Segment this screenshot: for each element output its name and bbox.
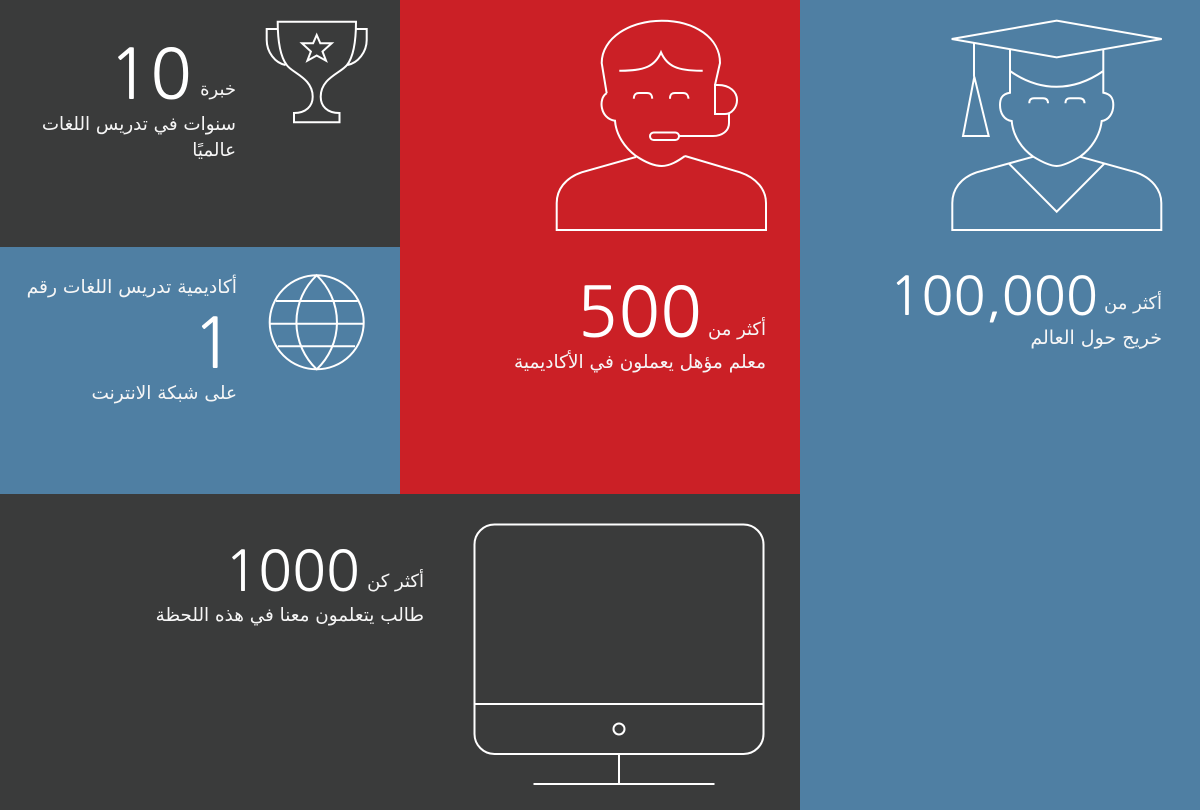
stat: 1000 students xyxy=(156,544,424,626)
number: 1000: 1000 xyxy=(224,544,360,600)
number: 1: 1 xyxy=(192,309,234,378)
text: qualified teachers: معلم مؤهل يعملون في الأكاديمية xyxy=(514,352,766,373)
panel: blue ranking xyxy=(0,247,400,494)
label: experience word: خبرة xyxy=(200,79,236,100)
panel: dark students xyxy=(0,494,800,810)
stat: rank 1 online xyxy=(27,274,237,404)
icon: monitor xyxy=(474,524,764,784)
text: years of teaching: عالميًا xyxy=(192,140,236,161)
text: on the internet: على شبكة الانترنت xyxy=(91,383,237,404)
label: more than: أكثر من xyxy=(708,319,766,340)
number: 10: 10 xyxy=(108,40,192,109)
text: students learning now: طالب يتعلمون معنا في هذه اللحظة xyxy=(156,605,424,626)
text: academy rank: أكاديمية تدريس اللغات رقم xyxy=(27,277,237,298)
number: 100,000: 100,000 xyxy=(889,270,1098,323)
label: more than: أكثر من xyxy=(1104,293,1162,314)
icon: graduate xyxy=(952,21,1162,230)
stat: 100,000 graduates xyxy=(889,270,1162,349)
text: years of teaching: سنوات في تدريس اللغات xyxy=(42,114,236,135)
label: more than: أكثر كن xyxy=(367,571,424,592)
icon: globe xyxy=(270,275,364,369)
text: graduates worldwide: خريج حول العالم xyxy=(1030,327,1162,349)
panel: red teachers xyxy=(400,0,800,494)
number: 500: 500 xyxy=(577,278,702,347)
text: years of teaching xyxy=(42,114,236,161)
stat: 500 teachers xyxy=(514,278,766,373)
panel: dark experience xyxy=(0,0,400,247)
icon: teacher with headset xyxy=(557,21,766,230)
stat: 10 years experience xyxy=(42,40,236,161)
icon: trophy xyxy=(267,22,367,122)
panel: blue graduates xyxy=(800,0,1200,810)
